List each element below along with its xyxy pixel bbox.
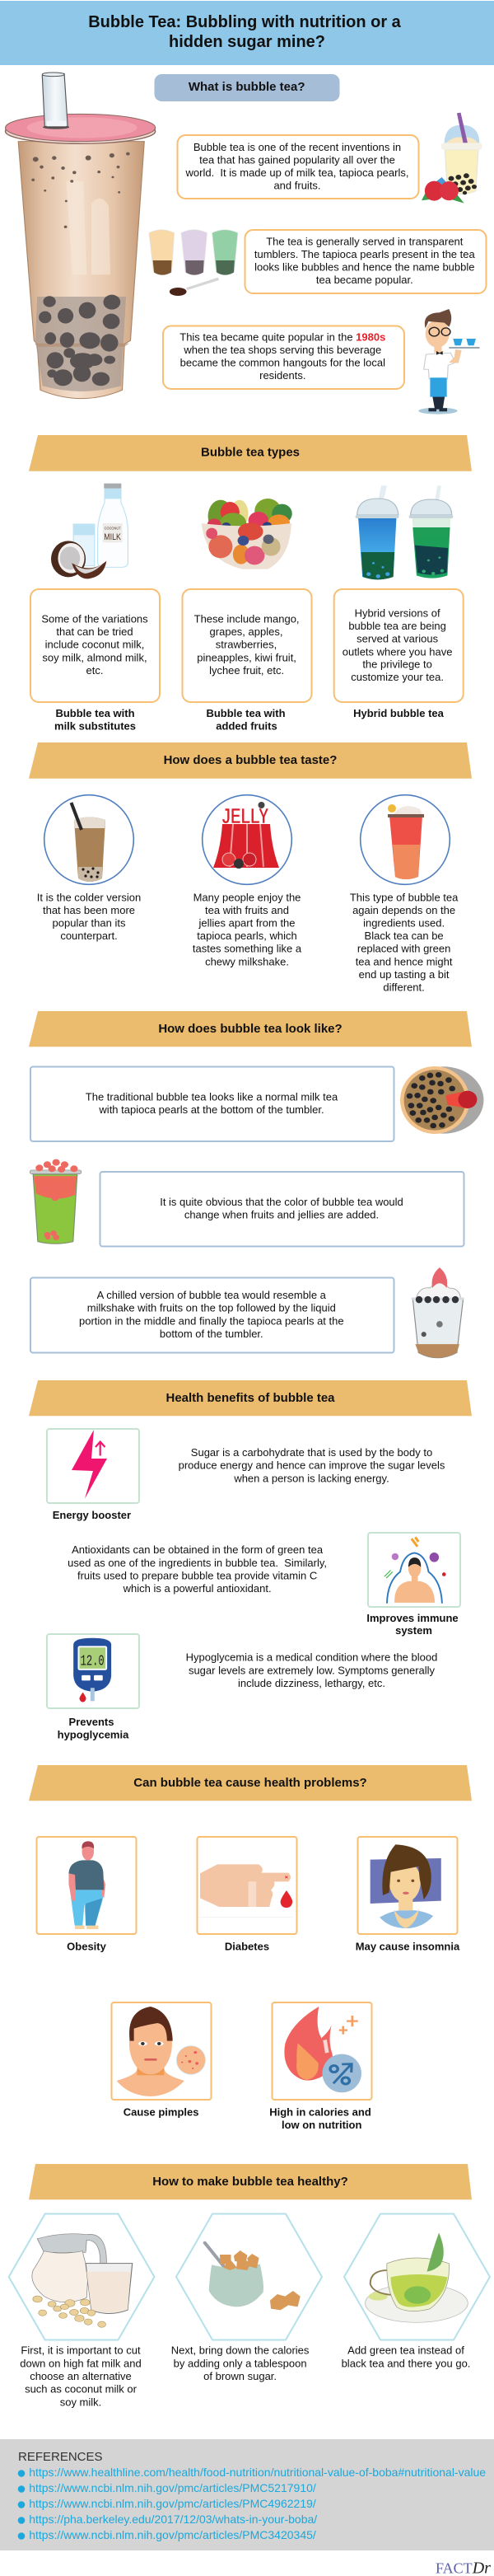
text box: served in tumblers: The tea is generally served in transparent xyxy=(266,236,464,247)
section pill: what is bubble tea: What is bubble tea? xyxy=(189,80,305,94)
title: hidden sugar mine? xyxy=(169,33,325,51)
panel: appearance xyxy=(30,1066,483,1358)
column: hybrid: the privilege to xyxy=(362,658,432,671)
column: depends on ingredients: end up tasting a bit xyxy=(359,968,450,981)
panel: bubble tea types xyxy=(30,484,464,733)
icon: pricked finger with blood drop: × xyxy=(285,1874,288,1880)
section banner: how does a bubble tea taste: How does a bubble tea taste? xyxy=(164,753,337,767)
panel: references xyxy=(0,2439,494,2550)
icon: obese man xyxy=(68,1841,105,1929)
column: hybrid: bubble tea are being xyxy=(348,620,446,632)
column: cold bubble tea xyxy=(37,795,141,942)
card: diabetes: Diabetes xyxy=(225,1941,269,1953)
benefit: immune system: fruits used to prepare bubble tea provide vitamin C xyxy=(77,1570,317,1582)
text box: intro: Bubble tea is one of the recent inventions in xyxy=(193,141,401,153)
column: depends on ingredients xyxy=(350,795,459,993)
references list: https://www.ncbi.nlm.nih.gov/pmc/articles/PMC4962219/ xyxy=(29,2497,316,2510)
section banner: health problems xyxy=(29,1765,472,1801)
column: added fruits xyxy=(183,589,311,733)
text box: colour change: It is quite obvious that the color of bubble tea would xyxy=(160,1196,403,1208)
text box: colour change xyxy=(100,1172,464,1246)
icon: sundae tumbler xyxy=(411,1267,464,1358)
panel: health problems xyxy=(36,1837,460,2131)
step 2: by adding only a tablespoon xyxy=(174,2357,307,2369)
section banner: health benefits: Health benefits of bubble tea xyxy=(165,1391,335,1405)
hexagon with sugar bowl xyxy=(176,2213,322,2340)
panel: taste xyxy=(37,795,459,993)
card: high calories: High in calories and xyxy=(269,2105,371,2118)
references list xyxy=(18,2466,486,2541)
icon: hybrid bubble tea cups xyxy=(356,485,453,579)
icon: coconut milk bottle xyxy=(51,484,128,578)
section banner: bubble tea types xyxy=(29,435,472,471)
icon: pricked finger with blood drop xyxy=(199,1864,293,1918)
column: jelly: tea with fruits and xyxy=(205,904,289,916)
step 1: soy milk. xyxy=(60,2396,101,2408)
benefit: energy booster: Sugar is a carbohydrate that is used by the body to xyxy=(191,1446,432,1459)
column: hybrid: served at various xyxy=(357,633,439,644)
benefit: energy booster: produce energy and hence can improve the sugar levels xyxy=(179,1459,445,1472)
text box: popular in the 1980s: This tea became quite popular in the 1980s xyxy=(179,331,385,343)
section banner: health problems: Can bubble tea cause health problems? xyxy=(133,1776,367,1790)
benefit: immune system: used as one of the ingredients in bubble tea. Similarly, xyxy=(68,1557,327,1569)
column: jelly: Many people enjoy the xyxy=(193,891,301,903)
text box: popular in the 1980s: when the tea shops serving this beverage xyxy=(183,344,381,356)
column: jelly: jellies apart from the xyxy=(198,917,296,930)
icon: fruit bowl xyxy=(202,499,292,569)
column: depends on ingredients: different. xyxy=(383,981,425,993)
step 1: such as coconut milk or xyxy=(25,2382,137,2395)
section banner: how does bubble tea look like: How does bubble tea look like? xyxy=(158,1022,343,1036)
text box: served in tumblers xyxy=(245,230,486,293)
text box: chilled version: milkshake with fruits on the top followed by the liquid xyxy=(87,1302,336,1314)
column: jelly: chewy milkshake. xyxy=(205,955,289,967)
text box: chilled version: A chilled version of bubble tea would resemble a xyxy=(97,1289,327,1301)
column: added fruits: added fruits xyxy=(216,720,277,733)
icon: bubble tea with berries xyxy=(422,113,482,204)
column: milk substitutes xyxy=(30,589,160,733)
icon: coconut milk bottle: MILK xyxy=(104,533,121,542)
step 1: First, it is important to cut xyxy=(21,2344,141,2357)
title banner xyxy=(0,1,494,65)
step 2: Next, bring down the calories xyxy=(171,2344,310,2357)
section banner: how does a bubble tea taste xyxy=(29,742,472,779)
column: milk substitutes: soy milk, almond milk, xyxy=(42,651,147,663)
text box: intro: and fruits. xyxy=(273,180,321,191)
text box: intro: world. It is made up of milk tea, tapioca pearls, xyxy=(185,166,408,179)
column: hybrid: Hybrid versions of xyxy=(355,607,440,620)
icon: person with immune shield xyxy=(384,1537,446,1604)
references heading: REFERENCES xyxy=(18,2450,103,2464)
benefit: prevents hypoglycemia: sugar levels are extremely low. Symptoms generally xyxy=(189,1664,436,1676)
text box: traditional: with tapioca pearls at the bottom of the tumbler. xyxy=(98,1103,324,1116)
text box: popular in the 1980s xyxy=(163,326,404,389)
text box: chilled version: portion in the middle and finally the tapioca pearls at the xyxy=(79,1314,344,1327)
column: hybrid: Hybrid bubble tea xyxy=(353,707,445,719)
panel: what is bubble tea xyxy=(6,73,486,415)
section banner: bubble tea types: Bubble tea types xyxy=(201,445,300,460)
icon: glucose meter: 12.0 xyxy=(81,1652,105,1670)
benefit: immune system: Improves immune xyxy=(366,1612,459,1624)
card: obesity: Obesity xyxy=(67,1941,107,1953)
icon: man with acne xyxy=(117,2007,206,2096)
references list: https://www.ncbi.nlm.nih.gov/pmc/articles/PMC3420345/ xyxy=(29,2528,316,2541)
references list: https://www.healthline.com/health/food-nutrition/nutritional-value-of-boba#nutritional-value xyxy=(29,2466,486,2479)
icon: waiter with tray xyxy=(418,309,479,415)
card: insomnia xyxy=(356,1837,460,1953)
text box: intro xyxy=(178,135,418,199)
benefit: immune system: which is a powerful antioxidant. xyxy=(123,1582,272,1595)
text box: intro: tea that has gained popularity all over the xyxy=(199,153,395,166)
column: milk substitutes: Bubble tea with xyxy=(55,707,135,719)
icon: jelly in circle: JELLY xyxy=(222,803,268,828)
column: hybrid: customize your tea. xyxy=(351,671,444,683)
icon: three coloured tumblers and spoon xyxy=(149,230,238,296)
column: cold bubble tea: counterpart. xyxy=(60,930,118,942)
icon: green fruit tea xyxy=(30,1159,82,1244)
section banner: make healthy: How to make bubble tea healthy? xyxy=(152,2175,348,2189)
section banner: health benefits xyxy=(29,1380,472,1416)
title: Bubble Tea: Bubbling with nutrition or a xyxy=(88,13,402,31)
card: pimples: Cause pimples xyxy=(124,2105,198,2118)
step 1 xyxy=(9,2213,155,2408)
text box: chilled version xyxy=(30,1277,394,1353)
column: milk substitutes: include coconut milk, xyxy=(45,639,144,651)
column: added fruits: Bubble tea with xyxy=(206,707,286,719)
hexagon with green tea cup xyxy=(344,2213,490,2340)
column: milk substitutes: milk substitutes xyxy=(54,720,136,733)
benefit: energy booster xyxy=(47,1429,445,1521)
benefit: energy booster: when a person is lacking energy. xyxy=(233,1472,389,1484)
card: high calories: low on nutrition xyxy=(282,2119,361,2131)
card: diabetes xyxy=(198,1837,296,1953)
text box: popular in the 1980s: became the common hangouts for the local xyxy=(180,357,385,369)
column: added fruits: These include mango, xyxy=(194,613,300,625)
benefit: immune system xyxy=(68,1533,460,1637)
icon: milk tea in circle xyxy=(44,795,133,884)
step 3 xyxy=(342,2213,490,2369)
card: obesity xyxy=(36,1837,137,1953)
section banner: how does bubble tea look like xyxy=(29,1011,472,1047)
column: added fruits: grapes, apples, xyxy=(210,625,282,638)
text box: traditional xyxy=(30,1066,394,1141)
benefit: immune system: Antioxidants can be obtained in the form of green tea xyxy=(72,1543,324,1556)
column: added fruits: strawberries, xyxy=(216,639,277,651)
step 1: choose an alternative xyxy=(30,2370,132,2382)
column: jelly xyxy=(193,795,302,967)
column: depends on ingredients: tea and hence might xyxy=(356,955,453,967)
column: hybrid xyxy=(334,589,464,719)
icon: red fruit tea in circle xyxy=(361,795,450,884)
column: added fruits: pineapples, kiwi fruit, xyxy=(197,651,296,663)
benefit: prevents hypoglycemia: include dizziness, lethargy, etc. xyxy=(238,1677,385,1689)
icon: flame and percent xyxy=(284,2007,361,2092)
benefit: energy booster: Energy booster xyxy=(53,1509,131,1521)
references list: https://www.ncbi.nlm.nih.gov/pmc/articles/PMC5217910/ xyxy=(29,2481,316,2494)
icon: jelly in circle xyxy=(203,795,291,884)
column: milk substitutes: that can be tried xyxy=(56,625,133,638)
column: depends on ingredients: This type of bubble tea xyxy=(350,891,459,903)
column: milk substitutes: Some of the variations xyxy=(41,613,148,625)
icon: coconut milk bottle: COCONUT xyxy=(105,527,121,532)
column: depends on ingredients: replaced with green xyxy=(357,943,450,955)
references list: https://pha.berkeley.edu/2017/12/03/whats-in-your-boba/ xyxy=(29,2513,317,2526)
text box: popular in the 1980s: residents. xyxy=(259,369,305,382)
column: depends on ingredients: again depends on the xyxy=(352,904,455,916)
benefit: prevents hypoglycemia: hypoglycemia xyxy=(58,1729,129,1740)
icon: lightning bolt xyxy=(72,1430,107,1499)
step 1: down on high fat milk and xyxy=(20,2357,142,2369)
column: depends on ingredients: ingredients used. xyxy=(363,917,445,930)
step 3: black tea and there you go. xyxy=(342,2357,470,2369)
step 2 xyxy=(171,2213,322,2382)
text box: served in tumblers: looks like bubbles and hence the name bubble xyxy=(254,260,475,274)
panel: health benefits xyxy=(47,1429,460,1740)
icon: tumbler from above xyxy=(400,1066,483,1134)
column: cold bubble tea: that has been more xyxy=(43,904,135,916)
icon: large bubble tea cup xyxy=(6,73,156,399)
icon: woman on pillow xyxy=(370,1844,441,1928)
text box: colour change: change when fruits and jellies are added. xyxy=(184,1208,379,1220)
column: jelly: tapioca pearls, which xyxy=(197,930,297,942)
section pill: what is bubble tea xyxy=(155,74,339,101)
hexagon with milk jug xyxy=(9,2213,155,2340)
panel: make healthy xyxy=(9,2213,490,2408)
column: cold bubble tea: It is the colder version xyxy=(37,891,141,903)
text box: served in tumblers: tumblers. The tapioca pearls present in the tea xyxy=(254,248,475,260)
text box: traditional: The traditional bubble tea looks like a normal milk tea xyxy=(86,1091,338,1103)
card: high calories xyxy=(269,2002,372,2131)
column: hybrid: outlets where you have xyxy=(343,645,452,658)
column: depends on ingredients: Black tea can be xyxy=(365,930,444,942)
column: jelly: tastes something like a xyxy=(193,943,302,955)
icon: glucose meter xyxy=(73,1638,111,1702)
step 3: Add green tea instead of xyxy=(347,2344,464,2357)
column: cold bubble tea: popular than its xyxy=(53,917,126,930)
benefit: prevents hypoglycemia xyxy=(47,1634,437,1740)
column: milk substitutes: etc. xyxy=(86,664,103,677)
column: added fruits: lychee fruit, etc. xyxy=(209,664,284,677)
card: pimples xyxy=(112,2002,211,2118)
card: insomnia: May cause insomnia xyxy=(356,1941,460,1953)
benefit: prevents hypoglycemia: Hypoglycemia is a medical condition where the blood xyxy=(186,1651,437,1664)
section banner: make healthy xyxy=(29,2164,472,2199)
step 2: of brown sugar. xyxy=(203,2370,277,2382)
text box: served in tumblers: tea became popular. xyxy=(316,274,413,286)
benefit: immune system: system xyxy=(395,1624,432,1637)
text box: chilled version: bottom of the tumbler. xyxy=(160,1328,263,1340)
benefit: prevents hypoglycemia: Prevents xyxy=(69,1716,114,1728)
